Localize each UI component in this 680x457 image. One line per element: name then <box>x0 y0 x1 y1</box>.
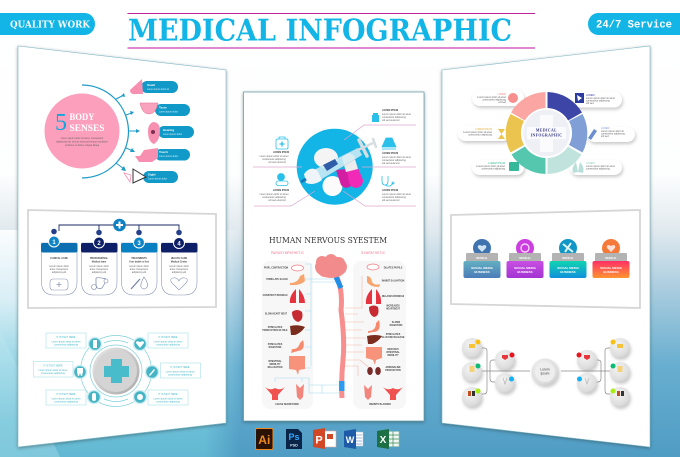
tab 2: SOCIAL MEDIA <box>514 266 537 270</box>
sheet background <box>442 46 650 447</box>
panel: left sheet <box>18 46 226 447</box>
tab 4: MEDICAL <box>605 257 617 260</box>
organ labels right <box>369 266 405 406</box>
card 4: 4 <box>177 242 181 248</box>
infographic: 5 body senses: ut labore et dolore magna aliqua <box>65 144 100 147</box>
badge: 24/7 service: 24/7 Service <box>596 20 672 32</box>
text box copy: IT IS TEXT HERE <box>158 393 178 396</box>
sense: touch: Lorem ipsum dolor <box>159 155 178 158</box>
organ labels right: INHIBIT SALIVATION <box>382 280 405 282</box>
donut callout copy: elit sed <box>601 135 609 138</box>
donut callout copy: LOREM <box>586 94 595 97</box>
organ labels left: MOBILITY <box>270 364 281 366</box>
node dots <box>476 340 616 394</box>
icon: pills <box>276 174 288 186</box>
text box copy: consectetur adipiscing <box>156 400 180 404</box>
side labels <box>271 251 386 255</box>
donut callout copy <box>463 93 625 170</box>
callout copy: LOREM IPSUM <box>382 190 398 192</box>
central node: ipsum <box>541 372 550 376</box>
donut callout copy: consectetur adipiscing <box>481 168 506 170</box>
icon: flask <box>382 138 396 149</box>
blue nerves <box>275 264 340 393</box>
donut callout copy: Lorem ipsum dolor sit amet <box>586 165 615 168</box>
icon: photoshop: Ps <box>288 432 300 442</box>
callout copy: LOREM IPSUM <box>382 153 398 155</box>
donut callout copy: LOREM <box>586 162 595 165</box>
organ labels left: INTESTINAL <box>268 360 282 363</box>
card 4: amet consectetur <box>170 268 188 271</box>
card 4: Lorem ipsum dolor <box>169 265 189 268</box>
infographic: node tree <box>462 338 630 407</box>
organ labels left: CAUSE SECRETIONS <box>275 403 299 406</box>
text box copy: Lorem ipsum dolor sit amet <box>154 398 183 400</box>
sense: sight: Sight <box>148 172 156 176</box>
organ labels right: DIGESTION <box>390 325 403 327</box>
donut callout copy: consectetur adipiscing <box>601 132 625 136</box>
ring icon glyphs <box>77 340 155 401</box>
sense: sight <box>124 169 178 183</box>
sense: smell: Smell <box>147 83 155 87</box>
donut callout copy: elit sed <box>586 102 594 105</box>
callout copy: elit sed eiusmod <box>382 199 400 202</box>
donut callout copy: LOREM <box>601 127 610 130</box>
organ labels right: INCREASES <box>386 304 400 308</box>
donut callout copy: Lorem ipsum dolor sit <box>601 130 624 133</box>
text box copy: IT IS TEXT HERE <box>56 393 76 396</box>
infographic: 5 body senses: BODY <box>70 112 95 122</box>
brain <box>315 254 347 278</box>
callout copy: consectetur adipiscing <box>382 116 406 119</box>
text box copy: consectetur adipiscing <box>168 374 192 376</box>
text box copy: IT IS TEXT HERE <box>170 366 190 369</box>
tab 2: BUSINESS <box>517 270 533 274</box>
organ labels left: PUPIL CONTRACTION <box>264 266 288 270</box>
sense: taste <box>140 103 190 116</box>
callout copy: Lorem ipsum dolor sit amet <box>382 113 411 116</box>
text box copy: Lorem ipsum dolor sit amet <box>39 369 68 372</box>
organs left <box>265 265 305 400</box>
donut callout copy: consectetur adipiscing <box>586 100 610 102</box>
icon: bottle <box>372 113 379 122</box>
icon: word <box>344 429 363 449</box>
card 3: amet consectetur <box>130 268 148 271</box>
organ labels left: DIGESTION <box>269 347 282 349</box>
icon: stethoscope <box>382 176 394 186</box>
sheet background <box>244 92 424 421</box>
card 1: Lorem ipsum dolor <box>49 265 69 268</box>
card 1: CLINICAL CARE <box>50 257 68 260</box>
infographic: 5 body senses: Lorem ipsum dolor sit amet, consectetur <box>61 137 103 140</box>
organ labels left: CONSTRICT BRONCHI <box>263 295 288 297</box>
chart: nervous system diagram <box>262 251 406 409</box>
donut callouts <box>458 90 635 175</box>
callout copy: Lorem ipsum dolor sit amet <box>382 193 411 196</box>
title: MEDICAL INFOGRAPHIC <box>128 14 512 49</box>
tab 1 <box>464 239 500 278</box>
text box copy: IT IS TEXT HERE <box>158 336 178 339</box>
text box copy: Lorem ipsum dolor sit amet <box>166 370 195 374</box>
card 3: Your health is first <box>129 260 149 264</box>
organs right <box>364 264 403 400</box>
organ labels right: DILATES PUPILS <box>384 266 403 270</box>
callout copy: elit sed eiusmod <box>382 119 400 122</box>
tab 4: BUSINESS <box>603 270 619 274</box>
icon: illustrator: Ai <box>258 433 270 447</box>
tab 1: MEDICAL <box>476 257 488 260</box>
card 4: adipiscing elit <box>172 271 187 274</box>
callout copy: Lorem ipsum dolor sit amet <box>260 193 289 196</box>
organ labels left: SLOW HEART BEAT <box>265 312 288 316</box>
card 3: adipiscing elit <box>132 271 147 274</box>
sense: smell <box>130 79 178 94</box>
donut callout copy: consectetur adipiscing <box>586 168 610 170</box>
callout copy: Lorem ipsum dolor sit amet <box>382 156 411 159</box>
card 2: adipiscing elit <box>92 271 107 274</box>
infographic: colored tabs <box>451 210 640 308</box>
icon: photoshop <box>286 429 302 449</box>
organ labels left: STIMULATES <box>268 343 283 346</box>
donut icons <box>498 93 597 173</box>
tab 3: MEDICAL <box>562 257 574 260</box>
donut callout copy: Lorem ipsum dolor sit amet <box>586 97 615 100</box>
card 1 <box>41 236 78 295</box>
organ labels right: PRODUCTION <box>385 370 401 372</box>
background <box>0 186 680 457</box>
donut centre title: INFOGRAPHIC <box>531 134 562 138</box>
sense: taste: Taste <box>159 106 167 110</box>
organ labels right: INTESTINAL <box>386 351 400 354</box>
icon: powerpoint <box>313 428 336 449</box>
callout copy: consectetur adipiscing <box>382 159 406 162</box>
donut callout copy: LOREM IPSUM <box>488 162 505 165</box>
text box copy: consectetur adipiscing <box>41 372 65 375</box>
sense: sight: Lorem ipsum dolor <box>148 178 167 180</box>
sense: taste: Lorem ipsum dolor <box>159 110 178 114</box>
callout copy: consectetur adipiscing <box>262 196 286 199</box>
nodes <box>462 338 630 407</box>
icon: excel <box>377 429 399 449</box>
sense: hearing <box>148 122 194 144</box>
card 1: adipiscing elit <box>52 271 67 274</box>
sense: hearing: Lorem ipsum dolor <box>163 133 182 136</box>
tab 3 <box>550 239 586 278</box>
callout copy: LOREM IPSUM <box>273 190 289 192</box>
infographic: medical donut <box>458 90 635 175</box>
callout copy: LOREM IPSUM <box>273 152 289 154</box>
card 2: PROFESSIONAL <box>90 257 109 260</box>
infographic: medical cross ring <box>34 333 200 406</box>
organ labels right: REDUCES <box>387 349 399 351</box>
central node <box>532 358 558 386</box>
card 4 <box>161 238 198 295</box>
infographic: 5 body senses: 5 <box>55 110 67 136</box>
organ labels right: MOBILITY <box>388 355 399 357</box>
sheet background <box>18 46 226 447</box>
capsule <box>336 153 363 188</box>
side labels: SYMPATHETIC <box>361 251 386 255</box>
connectors <box>478 348 613 394</box>
infographic: care cards <box>28 210 216 308</box>
card 2 <box>81 237 118 295</box>
tab 1: SOCIAL MEDIA <box>471 266 494 270</box>
card 2: Lorem ipsum dolor <box>89 265 109 268</box>
text box copy: Lorem ipsum dolor sit amet <box>52 340 81 344</box>
icon: first aid bag <box>276 137 288 149</box>
organ labels right: RELAXES BRONCHI <box>382 295 404 298</box>
tab 3: SOCIAL MEDIA <box>557 266 580 270</box>
donut callout copy: LOREM IPSUM <box>475 128 492 131</box>
organ labels right: INHIBITS BLADDER <box>369 403 391 406</box>
donut callout copy: Lorem ipsum dolor sit amet <box>463 131 492 134</box>
central node: Lorem <box>540 368 550 372</box>
donut callout copy: consectetur adipiscing <box>482 98 507 102</box>
spine <box>337 277 344 398</box>
text box copy: Lorem ipsum dolor sit amet <box>154 340 183 344</box>
spine blue segments <box>336 277 344 391</box>
card 2: amet consectetur <box>90 268 108 271</box>
donut callout copy: Lorem ipsum dolor sit amet <box>477 96 506 99</box>
icon: word: W <box>346 435 355 445</box>
organ labels right: STIMULATES <box>386 333 401 336</box>
tab 1: BUSINESS <box>474 270 490 274</box>
sense: touch <box>135 148 190 162</box>
panel: right sheet <box>442 46 650 447</box>
organ labels right: SLOWS <box>392 322 401 324</box>
syringe <box>301 139 376 184</box>
tab 2: MEDICAL <box>519 257 531 260</box>
organ columns <box>262 261 406 409</box>
callout copy: elit sed eiusmod <box>268 199 286 202</box>
badge: quality work: QUALITY WORK <box>10 20 91 30</box>
donut callout copy: Lorem ipsum dolor sit amet <box>476 165 505 168</box>
donut segments <box>506 92 587 174</box>
callout copy: LOREM IPSUM <box>382 110 398 112</box>
card 4: Medical Center <box>171 260 187 264</box>
icon: excel: X <box>380 435 387 446</box>
organ labels left: RELAXATION <box>268 366 283 369</box>
card 1: 1 <box>52 240 56 246</box>
icon: photoshop: PSD <box>290 444 298 448</box>
card 3: TREATMENTS <box>131 257 147 260</box>
tab 4 <box>592 239 630 278</box>
organ labels right: HEARTBEAT <box>386 308 401 310</box>
sense: touch: Touch <box>159 150 168 154</box>
callout copy: consectetur adipiscing <box>382 196 406 199</box>
text boxes <box>34 333 200 405</box>
infographic: medicine circle <box>253 110 416 206</box>
donut centre title <box>531 128 562 138</box>
panel: center sheet <box>244 92 424 421</box>
ring icons <box>74 338 158 404</box>
text box copy: IT IS TEXT HERE <box>56 336 76 339</box>
callout copy: consectetur adipiscing <box>262 158 286 161</box>
card 4: HEALTH CARE <box>171 257 188 260</box>
icon: illustrator <box>256 428 273 450</box>
side labels: PARASYMPATHETIC <box>271 251 305 255</box>
card 1: amet consectetur <box>50 268 68 271</box>
red nerves <box>345 276 372 376</box>
tab 4: SOCIAL MEDIA <box>600 266 623 270</box>
software icons <box>256 428 399 450</box>
donut callout copy: LOREM <box>497 93 506 96</box>
sense: hearing: Hearing <box>163 128 174 132</box>
text box copy: IT IS TEXT HERE <box>44 364 63 368</box>
pills <box>314 148 342 196</box>
heading: human nervous system: HUMAN NERVOUS SYESTEM <box>269 236 387 246</box>
sense: smell: Lorem ipsum dolor sit <box>147 88 169 91</box>
badge: quality work <box>0 13 95 35</box>
infographic: 5 body senses: SENSES <box>70 123 104 133</box>
callout copy <box>260 110 411 202</box>
text box copy: consectetur adipiscing <box>156 344 180 346</box>
callout copy: elit sed eiusmod <box>268 161 286 164</box>
donut callout copy: consectetur adipiscing <box>468 134 493 136</box>
text box copy: Lorem ipsum dolor sit amet <box>52 398 81 400</box>
card 3: 3 <box>137 241 141 247</box>
organ labels left <box>262 266 299 406</box>
node glyphs <box>468 344 624 396</box>
callout copy: Lorem ipsum dolor sit amet <box>260 155 289 158</box>
text box copy: consectetur adipiscing <box>54 400 78 404</box>
donut callout copy: elit sed <box>498 101 507 104</box>
icon: powerpoint: P <box>315 434 323 446</box>
organ labels right: GLUCOSE RELEASE <box>382 336 405 339</box>
text box copy: consectetur adipiscing <box>54 344 78 346</box>
card 3: Lorem ipsum dolor <box>129 265 149 268</box>
badge: 24/7 service <box>588 13 680 35</box>
organ labels left: STIMULATES <box>268 326 283 329</box>
infographic: 5 body senses <box>44 79 194 183</box>
card 3 <box>121 237 158 295</box>
organ labels right: ADRENALINE <box>385 366 401 369</box>
tab 2 <box>506 239 544 278</box>
card 2: 2 <box>97 241 101 247</box>
infographic: 5 body senses: adipiscing elit, sed do eiusmod tempor incididunt <box>56 140 108 144</box>
organ labels left: STIMULATE SALIVA <box>266 278 288 281</box>
card 2: Medical team <box>92 260 106 264</box>
donut centre title: MEDICAL <box>536 128 557 132</box>
callout copy: elit sed eiusmod <box>382 162 400 165</box>
text box copy <box>39 336 195 404</box>
tab 3: BUSINESS <box>560 270 576 274</box>
organ labels left: PRODUCTION OF BILE <box>262 330 288 332</box>
